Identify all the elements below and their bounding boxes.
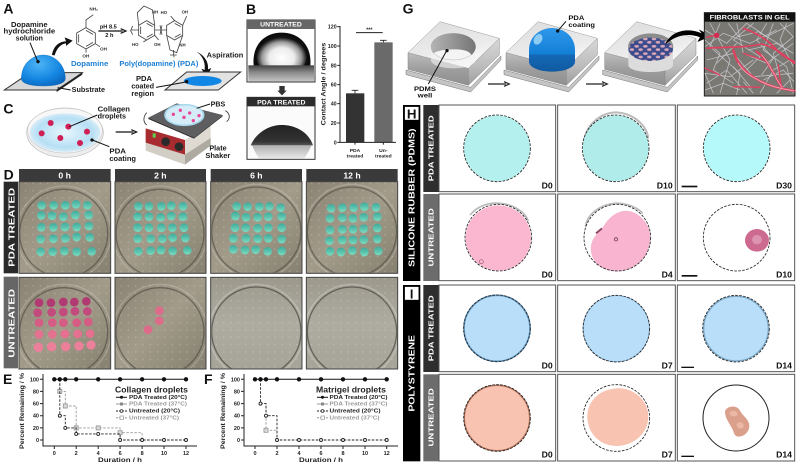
PDA coating leader dot xyxy=(90,138,94,142)
dopamine solution label: hydrochloride xyxy=(3,29,55,36)
H PDA D30 tile: D30 xyxy=(776,180,792,190)
panel letter B: B xyxy=(246,1,256,17)
x tick labels: 10 xyxy=(362,451,368,457)
contact angle bar chart xyxy=(321,25,396,160)
shaker label: Shaker xyxy=(205,153,231,160)
PDA treated droplet image: PDA TREATED xyxy=(257,100,306,106)
chart title: Collagen droplets xyxy=(115,386,189,394)
panel D: droplet photo grid xyxy=(4,167,399,379)
row label untreated: UNTREATED xyxy=(7,289,17,358)
contact angle bar chart: 60 xyxy=(331,83,337,89)
I untreated D14 tile: D14 xyxy=(776,450,792,460)
y tick labels: 20 xyxy=(234,426,240,432)
PDMS well leader xyxy=(428,51,447,84)
legend: Untreated (20°C) xyxy=(129,409,180,415)
x tick labels: 12 xyxy=(183,451,189,457)
plate shaker xyxy=(144,103,229,165)
dopamine solution label: solution xyxy=(16,36,43,43)
polydopamine atom labels: NH xyxy=(152,9,158,14)
block 2: PDA coating xyxy=(504,22,599,92)
curved arrow to dopamine xyxy=(52,37,73,55)
legend: PDA Treated (20°C) xyxy=(330,395,388,401)
panel H: silicone rubber PDMS results xyxy=(403,105,795,281)
dopamine atom labels xyxy=(82,7,108,58)
dopamine atom labels: OH xyxy=(100,47,108,52)
bar PDA treated xyxy=(346,93,364,142)
x tick labels xyxy=(53,451,189,457)
PDA treated droplets 2 h xyxy=(133,201,192,256)
panel letter F: F xyxy=(204,371,213,387)
PDA treated droplet image xyxy=(247,97,315,159)
I untreated D7 tile xyxy=(558,374,675,461)
row label untreated: UNTREATED xyxy=(428,388,435,446)
I untreated D14 tile xyxy=(677,374,795,461)
reaction conditions xyxy=(100,24,117,39)
series untreated 20C xyxy=(259,379,388,442)
polydopamine atom labels: HO xyxy=(132,42,139,47)
y tick labels: 0 xyxy=(237,438,240,444)
panel G: PDMS well process xyxy=(403,1,795,100)
H untreated D4 tile: D4 xyxy=(662,269,673,279)
reaction arrow xyxy=(98,29,126,33)
section label I: I xyxy=(410,287,413,301)
coating label: coating xyxy=(568,22,595,29)
polydopamine atom labels xyxy=(132,9,188,48)
panel F: matrigel droplets chart xyxy=(204,371,398,464)
y tick labels: 60 xyxy=(234,402,240,408)
substrate plate xyxy=(4,73,82,90)
substrate leader xyxy=(58,88,71,90)
PDA coating leader xyxy=(558,21,566,31)
H untreated D0 tile xyxy=(439,194,556,281)
reaction conditions: pH 8.5 xyxy=(100,24,117,30)
panel letter E: E xyxy=(3,371,12,387)
x tick labels: 8 xyxy=(341,451,345,457)
I untreated D0 tile: D0 xyxy=(542,450,553,460)
dopamine molecule xyxy=(77,15,100,53)
dopamine solution label xyxy=(3,22,55,43)
x axis title: Duration / h xyxy=(299,457,343,464)
PDA coating label: PDA xyxy=(109,148,126,155)
substrate thickness xyxy=(57,73,82,92)
axes xyxy=(40,374,197,449)
row label untreated xyxy=(4,277,18,368)
x axis title: Duration / h xyxy=(98,457,142,464)
coated region dot xyxy=(185,80,188,83)
process arrow xyxy=(116,130,137,134)
PDA coating leader xyxy=(92,140,109,147)
I untreated D7 tile: D7 xyxy=(662,450,673,460)
y tick labels xyxy=(30,377,39,444)
plate dot texture xyxy=(20,182,397,368)
polydopamine atom labels: OH xyxy=(182,9,188,14)
panel B: contact angle images and chart xyxy=(246,1,396,160)
row label PDA treated: PDA TREATED xyxy=(428,115,435,181)
down arrow between droplets xyxy=(277,86,287,95)
I PDA D7 tile xyxy=(558,285,675,372)
H PDA D10 tile: D10 xyxy=(657,180,673,190)
chart title: Matrigel droplets xyxy=(316,386,387,394)
petri dish xyxy=(27,108,103,157)
PBS label: PBS xyxy=(211,101,226,108)
column headers: 0 h xyxy=(58,171,71,181)
contact angle bar chart: 20 xyxy=(331,121,337,127)
section label I xyxy=(403,285,420,461)
coated region label xyxy=(131,76,154,98)
x tick labels: 12 xyxy=(384,451,390,457)
y tick labels: 80 xyxy=(33,389,39,395)
y tick labels: 40 xyxy=(33,414,39,420)
PDA coating label: PDA xyxy=(568,15,585,22)
x tick labels xyxy=(253,451,390,457)
contact angle bar chart: Contact Angle / degrees xyxy=(321,42,328,125)
polydopamine atom labels: HO xyxy=(161,10,168,15)
legend: Untreated (37°C) xyxy=(129,415,179,421)
contact angle bar chart: *** xyxy=(366,28,373,34)
y tick labels: 0 xyxy=(36,438,39,444)
y tick labels xyxy=(231,377,240,444)
panel C: plate shaker schematic xyxy=(3,100,231,165)
collagen leader xyxy=(69,115,97,127)
series untreated 20C xyxy=(58,379,187,442)
y tick labels: 60 xyxy=(33,402,39,408)
x tick labels: 2 xyxy=(75,451,78,457)
block 3: cells in gel xyxy=(603,22,698,92)
H untreated D0 tile: D0 xyxy=(542,269,553,279)
reaction conditions: 2 h xyxy=(105,33,114,39)
row label PDA treated xyxy=(4,182,18,273)
legend: PDA Treated (37°C) xyxy=(330,402,388,408)
y tick labels: 40 xyxy=(234,414,240,420)
plate shaker label: Plate xyxy=(209,146,227,153)
contact angle bar chart: 120 xyxy=(328,25,337,31)
y axis title: Percent Remaining / % xyxy=(220,373,227,449)
legend xyxy=(317,395,388,421)
fibroblast microscopy image: FIBROBLASTS IN GEL xyxy=(710,16,790,22)
section label I: POLYSTYRENE xyxy=(407,334,417,412)
y axis title: Percent Remaining / % xyxy=(19,373,26,449)
PDMS well label xyxy=(414,86,437,100)
panel E: collagen droplets chart xyxy=(3,371,197,464)
legend: Untreated (37°C) xyxy=(330,415,380,421)
column headers: 12 h xyxy=(343,171,361,181)
dopamine atom labels: NH₂ xyxy=(89,7,98,12)
fibroblast microscopy image xyxy=(704,13,795,96)
contact angle bar chart: 0 xyxy=(334,140,337,146)
row label PDA treated xyxy=(423,285,439,372)
PDMS well label: PDMS xyxy=(414,86,437,93)
I PDA D14 tile: D14 xyxy=(776,360,792,370)
column headers xyxy=(19,169,398,182)
panel I: polystyrene results xyxy=(403,285,795,461)
series untreated 37C xyxy=(260,404,277,440)
contact angle bar chart: 40 xyxy=(331,102,337,108)
arrow 2 xyxy=(586,82,607,86)
untreated droplets 0 h xyxy=(33,297,96,352)
leader to droplet xyxy=(30,43,38,61)
x tick labels: 4 xyxy=(97,451,101,457)
I untreated D0 tile xyxy=(439,374,556,461)
legend: PDA Treated (37°C) xyxy=(129,402,187,408)
x tick labels: 8 xyxy=(141,451,144,457)
row label PDA treated: PDA TREATED xyxy=(428,295,435,361)
coated substrate plate xyxy=(165,72,241,90)
column headers: 6 h xyxy=(250,171,263,181)
PDA treated droplets 12 h xyxy=(325,202,383,256)
row label untreated: UNTREATED xyxy=(428,208,435,266)
PDA name: Poly(dopamine) (PDA) xyxy=(119,59,199,68)
untreated droplet image: UNTREATED xyxy=(260,23,303,29)
H PDA D0 tile xyxy=(439,105,556,192)
aspiration arrow xyxy=(197,52,211,77)
coated region leader xyxy=(156,82,186,87)
PDMS well label: well xyxy=(417,93,433,100)
untreated droplets 2 h xyxy=(144,306,164,334)
section label H: SILICONE RUBBER (PDMS) xyxy=(407,128,417,267)
y tick labels: 100 xyxy=(231,377,240,383)
polydopamine molecule xyxy=(131,6,187,57)
panel A: PDA coating process xyxy=(3,1,243,98)
bar untreated xyxy=(374,42,393,142)
legend xyxy=(116,395,187,421)
series untreated 37C xyxy=(58,379,186,440)
photo backgrounds xyxy=(19,182,398,369)
x tick labels: 4 xyxy=(297,451,301,457)
x tick labels: 0 xyxy=(53,451,56,457)
axes xyxy=(241,374,398,449)
y tick labels: 20 xyxy=(33,426,39,432)
coating label: coating xyxy=(109,156,136,163)
untreated droplet image xyxy=(247,20,315,82)
I PDA D7 tile: D7 xyxy=(662,360,673,370)
petri dish rims row 2 xyxy=(20,284,397,368)
curved arrow to fibroblast image xyxy=(665,29,712,45)
section label H: H xyxy=(407,106,416,121)
polydopamine atom labels: OH xyxy=(154,42,160,47)
contact angle bar chart: 100 xyxy=(328,44,337,50)
y tick labels: 100 xyxy=(30,377,39,383)
PDA treated droplets 0 h xyxy=(36,200,96,256)
row label PDA treated xyxy=(423,105,439,192)
column headers: 2 h xyxy=(154,171,167,181)
PBS leader xyxy=(197,104,210,108)
coated region label: coated xyxy=(131,84,154,91)
collagen droplets xyxy=(39,120,90,146)
PDA coating leader dot xyxy=(556,29,559,33)
panel letter G: G xyxy=(403,1,414,17)
contact angle bar chart: treated xyxy=(375,154,392,160)
block 1: PDMS well xyxy=(406,22,501,92)
PDA treated droplets 6 h xyxy=(229,202,286,256)
x tick labels: 10 xyxy=(161,451,167,457)
legend: PDA Treated (20°C) xyxy=(129,395,187,401)
x tick labels: 6 xyxy=(319,451,323,457)
series PDA treated xyxy=(253,378,388,381)
legend: Untreated (20°C) xyxy=(330,409,381,415)
arrow 1 xyxy=(488,82,509,86)
H PDA D30 tile xyxy=(677,105,795,192)
petri dish rims row 1 xyxy=(16,184,399,281)
coated region label: PDA xyxy=(136,76,152,83)
contact angle bar chart: treated xyxy=(347,154,363,160)
PDA coated blue region xyxy=(184,76,222,86)
y tick labels: 80 xyxy=(234,389,240,395)
panel letter D: D xyxy=(4,167,14,183)
section label H xyxy=(403,105,420,281)
leader dot xyxy=(36,60,40,63)
dopamine name: Dopamine xyxy=(71,59,108,68)
blue dopamine droplet xyxy=(21,55,65,86)
I PDA D0 tile: D0 xyxy=(542,360,553,370)
x tick labels: 6 xyxy=(119,451,122,457)
H untreated D4 tile xyxy=(558,194,675,281)
coated region label: region xyxy=(131,91,154,98)
contact angle bar chart: Un- xyxy=(379,148,388,154)
dopamine atom labels: OH xyxy=(82,53,90,58)
row label PDA treated: PDA TREATED xyxy=(7,188,17,267)
I PDA D14 tile xyxy=(677,285,795,372)
dopamine solution label: Dopamine xyxy=(11,22,48,29)
PDMS well leader dot xyxy=(445,49,449,52)
row label untreated xyxy=(423,374,439,461)
droplets label: droplets xyxy=(98,114,126,121)
aspiration label: Aspiration xyxy=(207,53,243,60)
collagen label: Collagen xyxy=(98,107,130,114)
panel letter A: A xyxy=(3,1,13,17)
substrate label: Substrate xyxy=(72,87,105,94)
contact angle bar chart: PDA xyxy=(350,148,361,154)
I PDA D0 tile xyxy=(439,285,556,372)
H PDA D10 tile xyxy=(558,105,675,192)
x tick labels: 2 xyxy=(275,451,279,457)
row label untreated xyxy=(423,194,439,281)
x tick labels: 0 xyxy=(253,451,257,457)
series PDA treated xyxy=(53,378,188,381)
panel letter C: C xyxy=(3,100,13,116)
H untreated D10 tile xyxy=(677,194,795,281)
contact angle bar chart: 80 xyxy=(331,63,337,69)
H untreated D10 tile: D10 xyxy=(776,269,792,279)
H PDA D0 tile: D0 xyxy=(542,180,553,190)
polydopamine atom labels: NH xyxy=(179,43,186,48)
